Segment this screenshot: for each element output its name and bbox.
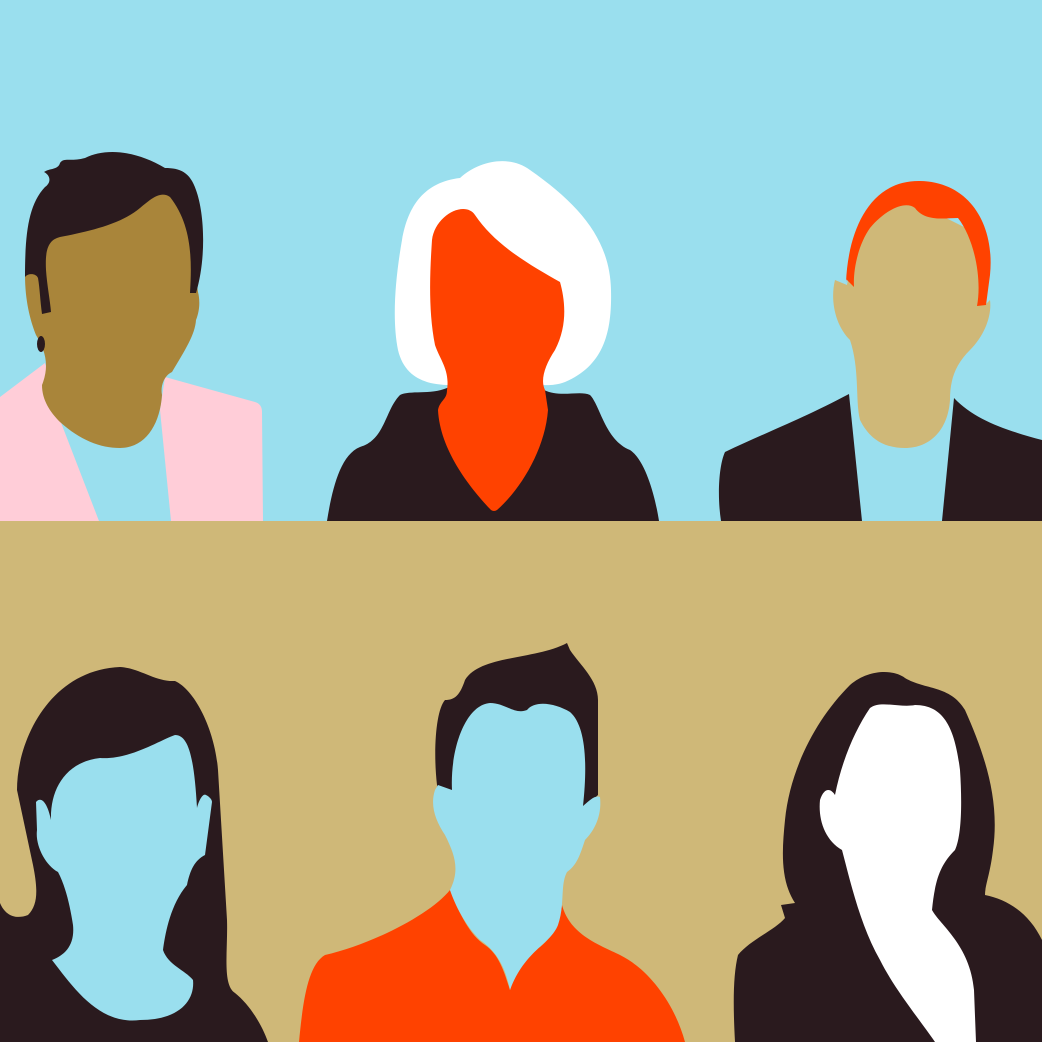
person: woman in pink jacket — [0, 152, 263, 521]
earring — [37, 336, 45, 352]
blue face — [36, 735, 212, 1020]
orange face — [430, 209, 564, 511]
pink jacket — [0, 363, 263, 521]
person: man in orange shirt — [299, 643, 685, 1042]
hair and body — [0, 667, 268, 1042]
blue face — [433, 703, 600, 990]
person: woman with long dark hair — [0, 667, 268, 1042]
panel: bottom tan background — [0, 521, 1042, 1042]
hair and body — [734, 672, 1042, 1042]
panel: top sky-blue background — [0, 0, 1042, 521]
brown face — [25, 185, 199, 448]
dark hair — [25, 152, 203, 314]
orange shirt — [299, 890, 685, 1042]
white face — [820, 704, 976, 1042]
person: woman with white hair — [327, 161, 659, 521]
person: woman with white face and long dark hair — [734, 672, 1042, 1042]
dark jacket — [327, 388, 659, 521]
white hair — [395, 161, 611, 385]
dark jacket — [719, 394, 1042, 521]
person: man with orange hair — [719, 181, 1042, 521]
tan face — [833, 195, 990, 448]
dark hair — [435, 643, 598, 808]
orange hair — [846, 181, 991, 306]
